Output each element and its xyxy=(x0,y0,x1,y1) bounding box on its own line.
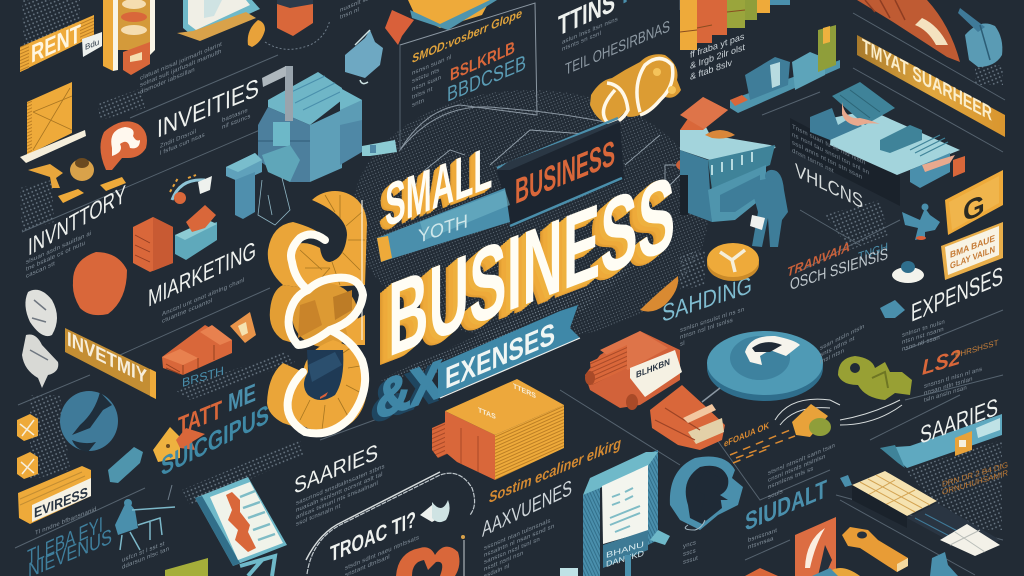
label: bbdcseb: BBDCSEB xyxy=(447,50,526,107)
icon: orange box xyxy=(277,0,313,36)
heading: aaxvuenes: AAXVUENES xyxy=(482,475,572,542)
panel: teal building and person xyxy=(676,97,788,247)
text block: chart micro labels xyxy=(690,31,745,82)
text block: sahding heading and caption xyxy=(662,272,752,348)
text block: ls2 caption: snsnsn tl nlsn nl ans xyxy=(924,366,982,390)
panel: connector box xyxy=(340,88,397,165)
icon: globe xyxy=(60,391,118,452)
panel: teal billboard: DANNKD xyxy=(606,549,644,569)
text block: top center micro copy xyxy=(412,54,452,109)
icon: bottom partial shapes xyxy=(745,552,958,576)
icon: teal figure at desk xyxy=(115,485,175,550)
text block: ring caption xyxy=(683,539,698,566)
icon: small teal figure xyxy=(902,204,940,240)
panel: orange truck: BLHKBN xyxy=(636,357,670,380)
label: brith: BRSTH xyxy=(182,364,224,390)
text block: inventory caption: slsuan asdn sauitfan ai xyxy=(26,230,91,266)
text block: desk caption: usfcn st l sst st xyxy=(122,540,165,564)
banner: expenses ribbon: EXENSES xyxy=(445,316,555,396)
icon: white robot disc xyxy=(880,261,924,318)
text block: bottom-left micro copy: Tl nndne bfbansnanid xyxy=(35,505,97,537)
text block: expenses caption xyxy=(902,318,945,353)
panel: teal billboard xyxy=(560,450,670,576)
icon: orange leaf roof xyxy=(857,0,960,62)
label: tranvaia: TRANVAIA xyxy=(787,239,850,280)
text block: aaxvuenes caption: sanstsn nssl tsnl sn xyxy=(484,536,540,566)
icon: cheese wedge with wires xyxy=(775,399,902,437)
icon: olive gear xyxy=(838,356,912,400)
text block: desk panel micro copy: Tnsm suan tu ss ntd nlstn xyxy=(792,123,866,167)
panel: stacked paper block: TTERS xyxy=(513,381,536,400)
heading: suicgipus: SUICGIPUS xyxy=(161,398,269,482)
banner: yoth band xyxy=(377,188,510,262)
panel: top-center yellow tray xyxy=(408,0,497,30)
heading: saaries: SAARIES xyxy=(294,439,378,499)
text block: marketing caption: ctuantne ccuantol xyxy=(162,297,212,325)
icon: white scroll statue xyxy=(22,290,58,388)
icon: yellow tag and star xyxy=(153,427,205,462)
banner: yoth band: YOTH xyxy=(418,210,468,248)
text block: sahding heading and caption: sl xyxy=(680,340,685,348)
text block: top center micro copy: tnlss nt xyxy=(412,86,433,101)
icon: red car xyxy=(650,385,725,450)
text block: lower centre micro copy: cnsnl ntsnls ntslnlsn xyxy=(768,453,826,484)
icon: yellow key xyxy=(842,527,908,572)
text block: ttins caption: aslun lnss ltsn nsns xyxy=(562,16,618,46)
text block: desk panel micro copy: sssl anns nt tsn stn ssan xyxy=(792,139,863,181)
text block: desk caption: ddarsun nlsc tan xyxy=(122,545,169,571)
panel: business band xyxy=(497,118,624,226)
label: oscienis: OSCH SSIENSIS xyxy=(790,245,888,294)
icon: green panel xyxy=(165,558,208,576)
callout: yellow dollar card xyxy=(945,170,1003,235)
text block: expenses caption: nsnn ntl ssan xyxy=(902,334,940,353)
text block: saaries caption: anlsas tsinunl nts snsaalnanl xyxy=(296,480,378,521)
heading: marketing: MIARKETING xyxy=(148,236,256,313)
heading: rent: RENT xyxy=(31,18,81,69)
text block: saaries right note: ORNUHUHSAMIR xyxy=(942,468,1008,497)
text block: sahding heading and caption: ntnsn nsl tnl tsnlss xyxy=(680,317,733,341)
heading: sahding: SAHDING xyxy=(662,272,752,328)
text block: top-left micro copy: clatuat nissal joirmarlt olarint xyxy=(140,41,222,82)
panel: tall filing column xyxy=(103,0,155,75)
text block: aaxvuenes caption: nssalntn nl nsan ssnd sn xyxy=(484,523,555,559)
text block: desk panel micro copy xyxy=(792,123,869,193)
icon: teal sketched figure xyxy=(345,30,383,84)
text block: disc caption xyxy=(820,323,865,366)
callout: white note card: BMA BAUE xyxy=(950,233,995,260)
panel: ledger strips xyxy=(840,471,1000,556)
banner: inventory: INVETMIY xyxy=(67,328,147,389)
text block: top center micro copy: sststu nts xyxy=(412,67,439,85)
icon: pin line xyxy=(461,535,465,576)
callout: troac tip capsule: TROAC TI? xyxy=(330,506,416,567)
text block: aaxvuenes caption: sssnsnt ntan tulsnsnals xyxy=(484,517,551,552)
text block: chart micro labels: ff fraba yt pas xyxy=(690,31,745,60)
icon: orange pie xyxy=(100,121,147,170)
icon: tablet on stand xyxy=(177,0,260,41)
text block: top dots micro copy xyxy=(340,0,371,21)
heading: tatt me: ME xyxy=(228,377,256,418)
heading: tieba eyi nievenus: TLEBA EYI xyxy=(27,512,103,570)
text block: ls2 caption xyxy=(924,366,982,404)
text block: marketing caption: Ancsnl unt onot aitnlng chanl xyxy=(162,277,244,318)
label: vhlcns: VHLCNS xyxy=(795,160,863,213)
text block: desk panel micro copy: dnsn tanns nst xyxy=(792,147,834,175)
heading: tatt me xyxy=(178,377,256,441)
heading: inventory: INVNTTORY xyxy=(28,181,126,262)
text block: saaries right note: DRN DR 2 B4 DIG xyxy=(942,460,1008,489)
label: ls2: PHRSHSST xyxy=(955,338,998,360)
icon: orange yellow tracks xyxy=(640,276,678,312)
panel: teal shelf city xyxy=(730,25,840,113)
text block: lower centre micro copy xyxy=(768,442,835,501)
panel: teal desk scene xyxy=(790,82,965,206)
callout: white note card: GLAY VAILN xyxy=(950,244,995,271)
text block: inveities caption: l fsfua cun nsas xyxy=(160,131,205,157)
text block: orange dashed note: eFOAUA OK xyxy=(724,420,769,449)
text block: top-left micro copy: solnat sult ijarfusalt mamulth xyxy=(140,48,222,89)
text block: top center panel xyxy=(412,6,526,107)
icon: crate boxes xyxy=(17,414,38,479)
text block: expenses caption: ntsn nst nsann xyxy=(902,326,944,346)
panel: stacked paper block xyxy=(432,379,564,480)
decorative circuit strokes xyxy=(390,130,690,225)
icon: orange rounded tank xyxy=(73,252,127,315)
title: small (3D): SMALL xyxy=(385,133,492,240)
panel: rent sign: Bdu xyxy=(85,36,100,52)
text block: top dots micro copy: tnsn nl xyxy=(340,6,359,21)
label: ls2: LS2 xyxy=(922,345,961,380)
icon: teal ring with silhouette xyxy=(670,456,743,530)
text block: expenses caption: snlnsn tn nulsn xyxy=(902,318,945,339)
icon: gold coin xyxy=(707,243,759,281)
text block: ls2 caption: nnsan ntln tsnlan xyxy=(924,375,973,397)
text block: troac caption: stsdn sdlnt naeu ntnlssats xyxy=(345,534,419,572)
icon: small yellow tag xyxy=(248,20,265,47)
icon: big numeral ornament xyxy=(267,191,368,433)
text block: siudalt caption: bsnssnant xyxy=(748,527,777,544)
text block: ring caption: sssut xyxy=(683,555,698,566)
text block: top center micro copy: sntn xyxy=(412,97,424,109)
text block: chart micro labels: & ftab 8slv xyxy=(690,57,732,82)
text block: top center micro copy: nsnsn suan nl xyxy=(412,54,452,77)
icon: orange square xyxy=(795,517,836,576)
text block: ttins caption: ntsnts sn ssnl xyxy=(562,30,601,53)
banner: express: EVIRESS xyxy=(34,485,88,522)
text block: lower centre micro copy: stsnsl ntnsnlt sann tsan xyxy=(768,442,835,477)
callout: yellow dollar card: G xyxy=(963,189,985,229)
icon: orange block stack xyxy=(162,325,232,375)
icon: small flag xyxy=(230,312,256,343)
panel: stacked paper block: TTAS xyxy=(478,405,496,421)
label: tngh: TNGH xyxy=(858,240,888,264)
title: business (3D): BUSINESS xyxy=(388,153,675,380)
text block: inveities caption: Zndit Dnsroil xyxy=(160,128,196,150)
heading: orange business: BUSINESS xyxy=(515,132,615,212)
panel: teal billboard: BHANU xyxy=(606,540,644,560)
banner: teal saaries ribbon xyxy=(880,414,1002,468)
label: bslkrlb: BSLKRLB xyxy=(450,37,515,85)
text block: aaxvuenes caption: nsstt nsnl nsn xyxy=(484,550,524,573)
text block: inventory caption: cascan stt xyxy=(26,260,55,280)
callout: troac tip capsule xyxy=(306,472,475,574)
text block: saaries caption: nuasaln ssnlsntt oorsnt aslt tal xyxy=(296,471,383,514)
text block: orange dashed note xyxy=(724,420,795,463)
text block: top-left micro copy: dismoder iabssillan xyxy=(140,66,195,96)
icon: teal extruded ampersand: &X xyxy=(376,350,442,431)
text block: inventory caption: tne bskale cs ot nutu xyxy=(26,240,85,273)
text block: chart micro labels: & Irgb 2ilr olst xyxy=(690,42,745,71)
callout: white note card xyxy=(941,222,1003,280)
text block: inveities side note: bastasne xyxy=(222,107,248,124)
bar chart: top colored columns xyxy=(680,0,790,50)
icon: teal tube xyxy=(108,447,143,483)
panel: rent sign xyxy=(20,15,102,72)
text block: aaxvuenes caption xyxy=(484,516,555,576)
icon: golden knot xyxy=(590,54,681,125)
panel: marketing cluster xyxy=(133,175,217,272)
panel: orange truck xyxy=(585,331,682,410)
text block: lower centre micro copy: souls xyxy=(768,488,783,501)
text block: saaries caption xyxy=(296,463,385,528)
panel: factory machine xyxy=(226,66,342,225)
text block: disc caption: ssan ntsln ntsln xyxy=(820,323,865,352)
panel: yellow crate xyxy=(20,82,126,203)
icon: teal disc xyxy=(702,331,823,402)
label: teil ohesirbnas: TEIL OHESIRBNAS xyxy=(565,17,670,79)
text block: siudalt caption: ntsvnsaa xyxy=(748,535,774,551)
heading: saaries right: SAARIES xyxy=(920,394,998,450)
icon: red flag shape xyxy=(385,10,414,45)
dotted halo behind the title xyxy=(352,90,708,382)
text block: saaries caption: sascnnsd snsdtalnssaten stbns xyxy=(296,463,385,507)
text block: lower centre micro copy: nsnnlsns tnls ss xyxy=(768,465,814,491)
banner: express xyxy=(18,466,91,524)
text block: sahding heading and caption: ssnlsn snsulst nl ns sn xyxy=(680,306,745,334)
label: sostim ecaliner elkirg: Sostim ecaliner elkirg xyxy=(489,435,621,507)
text block: desk panel micro copy: ns nsnl tau snsnl tsn snl sn xyxy=(792,131,869,177)
panel: checklist book xyxy=(195,477,287,576)
label: ls2 xyxy=(922,338,998,380)
label: small business glope: SMOD:vosberr Glope xyxy=(412,6,522,66)
text block: ring caption: sscs xyxy=(683,547,696,558)
text block: disc caption: tnsl ntsn xyxy=(820,347,844,366)
heading: siudalt: SIUDALT xyxy=(745,474,827,537)
text block: saaries caption: ssol tcnsnaln nt xyxy=(296,502,341,528)
heading: tatt me: TATT xyxy=(178,394,222,441)
icon: orange heart xyxy=(396,547,459,576)
text block: inveities side note: nif ssuncs xyxy=(222,113,251,131)
icon: teal dome helmet xyxy=(958,8,1002,67)
text block: ring caption: yncs xyxy=(683,539,696,550)
text block: disc caption: snts ntlns nt xyxy=(820,335,855,359)
text block: top center micro copy: nssn suan xyxy=(412,74,441,93)
text block: ls2 caption: tsln ansln nsan xyxy=(924,384,967,404)
heading: inveities: INVEITIES xyxy=(157,72,259,144)
icon: teal extruded ampersand: &X xyxy=(371,354,437,435)
